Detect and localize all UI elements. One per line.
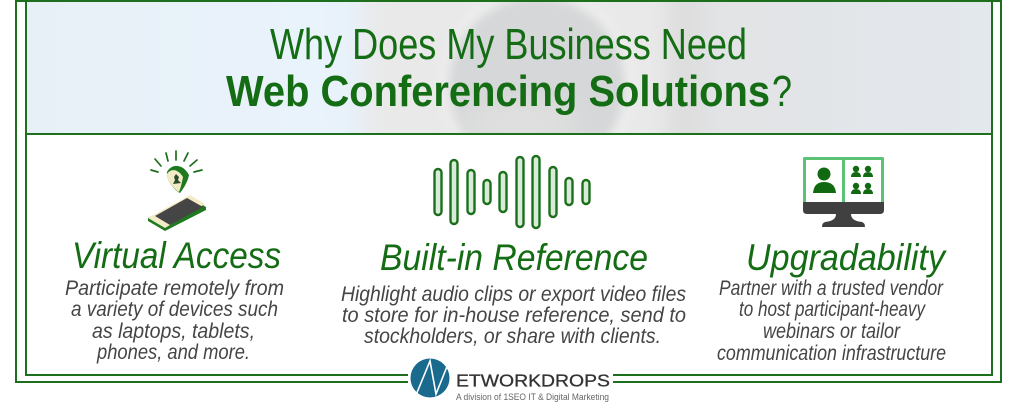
text block: Virtual Access: a variety of devices such [71, 298, 278, 321]
header rules [16, 1, 1001, 134]
text block: Upgradability: Partner with a trusted vendor [719, 277, 944, 300]
text block: Upgradability: webinars or tailor [763, 320, 901, 343]
text block: Built-in Reference: Highlight audio clips or export video files [341, 283, 686, 306]
header panel background [27, 2, 991, 133]
text block: Virtual Access [65, 277, 284, 364]
title: Why Does My Business Need [270, 20, 747, 69]
title: ? [772, 67, 792, 116]
icon: video call monitor [803, 157, 884, 227]
text block: Built-in Reference: to store for in-house reference, send to [342, 304, 686, 327]
logo: Networkdrops [410, 358, 610, 402]
logo: Networkdrops: ETWORKDROPS [456, 370, 610, 390]
logo: Networkdrops: A division of 1SEO IT & Digital Marketing [456, 392, 609, 402]
icon: phone with location pin [148, 151, 206, 231]
text block: Built-in Reference [341, 283, 686, 348]
text block: Virtual Access: Participate remotely from [65, 277, 284, 300]
heading: Upgradability: Upgradability [746, 237, 947, 278]
heading: Built-in Reference: Built-in Reference [380, 237, 648, 278]
title [226, 20, 792, 116]
heading: Virtual Access: Virtual Access [72, 235, 281, 276]
text block: Upgradability: communication infrastructure [717, 342, 946, 365]
title: Web Conferencing Solutions [226, 67, 770, 116]
text block: Virtual Access: phones, and more. [96, 341, 250, 364]
text block: Upgradability [717, 277, 946, 365]
text block: Virtual Access: as laptops, tablets, [92, 320, 255, 343]
text block: Upgradability: to host participant-heavy [739, 298, 926, 321]
icon: audio waveform [434, 156, 590, 228]
text block: Built-in Reference: stockholders, or share with clients. [364, 325, 661, 348]
